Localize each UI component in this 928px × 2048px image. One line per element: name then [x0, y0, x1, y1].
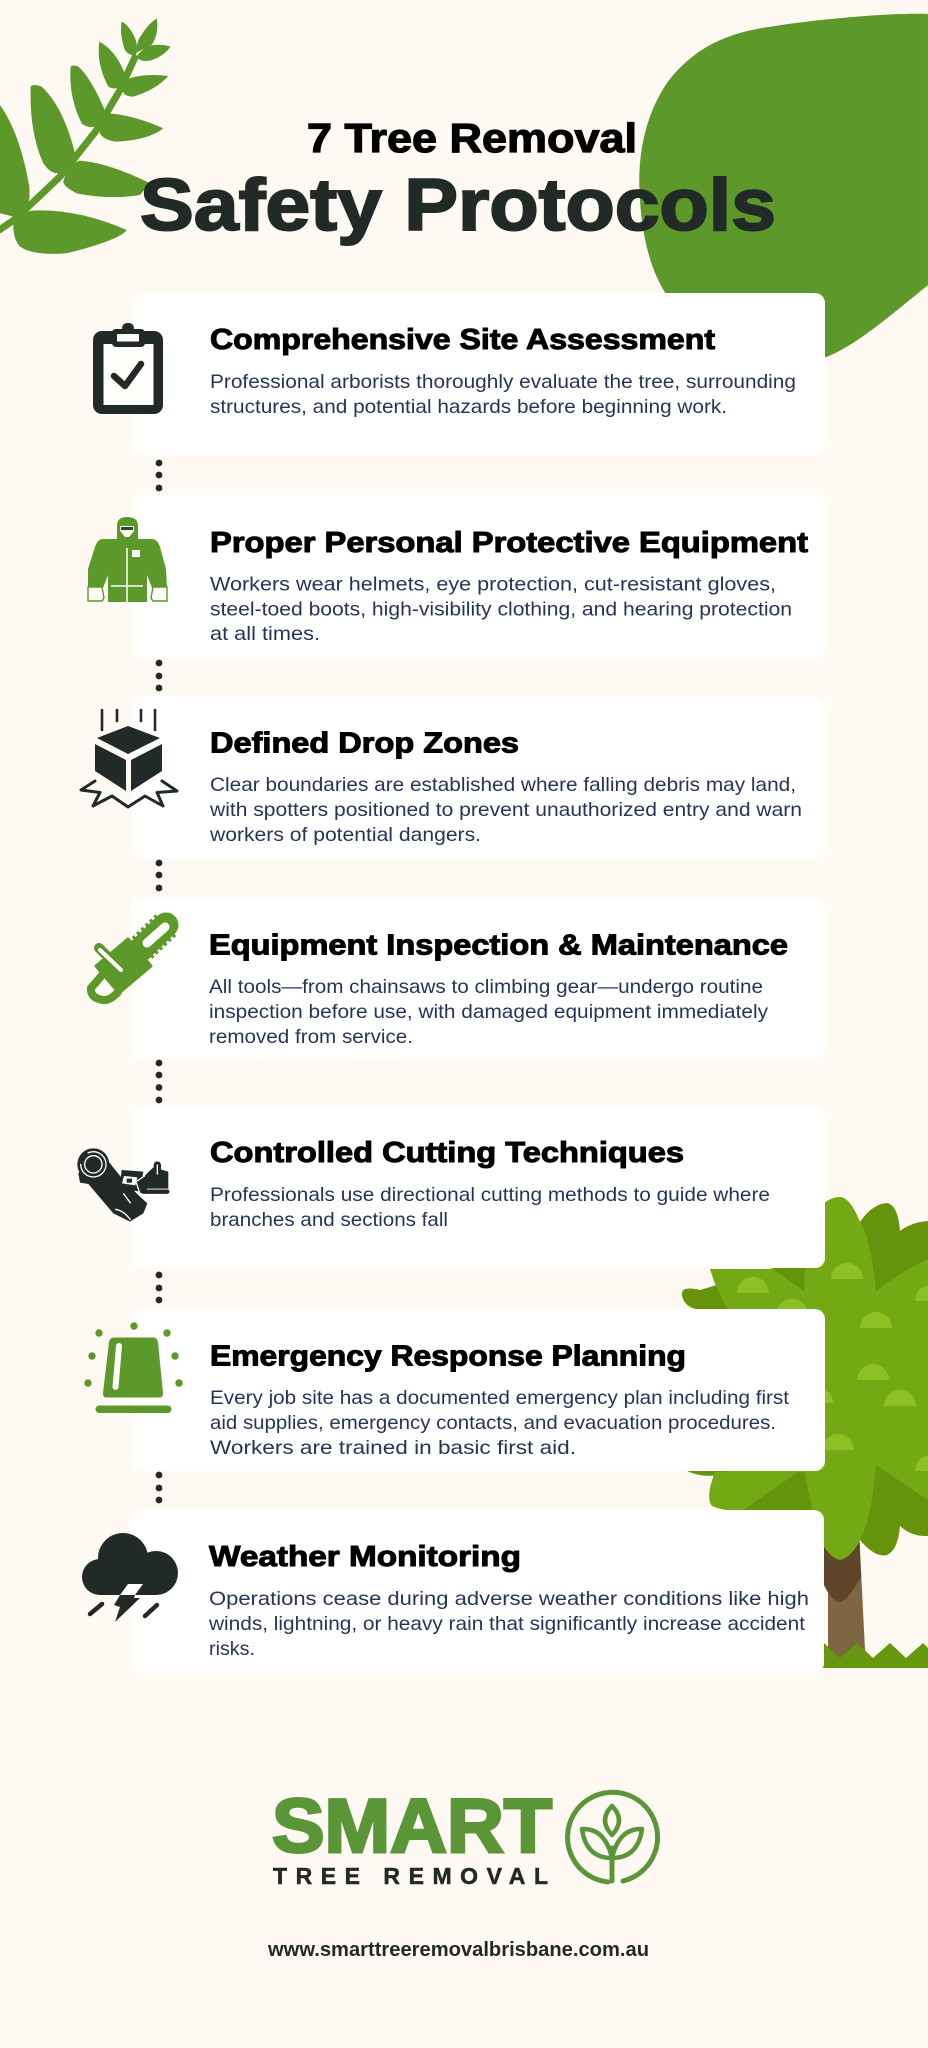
- description: structures, and potential hazards before beginning work.: [210, 396, 727, 418]
- description: [210, 1184, 770, 1231]
- description: winds, lightning, or heavy rain that significantly increase accident: [208, 1613, 806, 1635]
- description: [209, 774, 802, 846]
- description: risks.: [209, 1638, 255, 1660]
- icon: siren: [84, 1322, 183, 1413]
- heading: Weather Monitoring: [209, 1541, 521, 1573]
- icon: log and chainsaw: [77, 1148, 168, 1222]
- title: [140, 115, 776, 246]
- title line 2: Safety Protocols: [140, 165, 776, 246]
- icon: protective suit: [88, 517, 167, 602]
- panel: weather monitoring: [82, 1510, 824, 1673]
- icon: clipboard: [93, 323, 163, 414]
- connector dots 2: [156, 660, 162, 691]
- description: Workers wear helmets, eye protection, cut-resistant gloves,: [210, 574, 776, 596]
- connector dots 3: [156, 860, 162, 891]
- description: Clear boundaries are established where falling debris may land,: [210, 774, 796, 796]
- connector dots 4: [156, 1060, 162, 1103]
- panel: emergency response planning: [84, 1309, 825, 1471]
- description: at all times.: [210, 623, 320, 645]
- panel: equipment inspection and maintenance: [91, 898, 825, 1059]
- decorative green blob: [639, 14, 928, 357]
- description: [209, 976, 768, 1048]
- logo: smart tree removal: [272, 1784, 658, 1889]
- logo wordmark: SMART: [272, 1784, 552, 1869]
- connector dots 6: [156, 1472, 162, 1503]
- logo subline: TREE REMOVAL: [273, 1863, 548, 1889]
- website url: www.smarttreeremovalbrisbane.com.au: [267, 1939, 649, 1961]
- description: aid supplies, emergency contacts, and evacuation procedures.: [210, 1412, 776, 1434]
- description: [210, 574, 792, 645]
- heading: Comprehensive Site Assessment: [210, 324, 716, 356]
- description: workers of potential dangers.: [209, 824, 481, 846]
- logo emblem: [568, 1792, 658, 1882]
- panel: controlled cutting techniques: [77, 1106, 825, 1268]
- description: [210, 371, 796, 418]
- description: inspection before use, with damaged equipment immediately: [209, 1001, 768, 1023]
- icon: falling box: [81, 710, 177, 807]
- panel: defined drop zones: [81, 696, 825, 859]
- heading: Proper Personal Protective Equipment: [210, 527, 809, 559]
- description: branches and sections fall: [210, 1209, 448, 1231]
- description: steel-toed boots, high-visibility clothing, and hearing protection: [210, 598, 792, 620]
- illustration: tree: [682, 1197, 928, 1668]
- icon: chainsaw: [91, 925, 166, 1000]
- title line 1: 7 Tree Removal: [307, 115, 637, 161]
- description: All tools—from chainsaws to climbing gear—undergo routine: [209, 976, 763, 998]
- description: Professionals use directional cutting methods to guide where: [210, 1184, 770, 1206]
- icon: fern branch: [0, 18, 171, 254]
- heading: Equipment Inspection & Maintenance: [209, 930, 788, 962]
- icon: storm cloud: [82, 1533, 178, 1622]
- description: Operations cease during adverse weather conditions like high: [209, 1588, 809, 1610]
- description: Every job site has a documented emergency plan including first: [210, 1387, 790, 1409]
- heading: Controlled Cutting Techniques: [210, 1137, 684, 1169]
- connector dots 1: [156, 460, 162, 491]
- description: [210, 1387, 790, 1459]
- description: [208, 1588, 809, 1660]
- panel: proper personal protective equipment: [88, 495, 825, 658]
- description: removed from service.: [209, 1026, 413, 1048]
- description: with spotters positioned to prevent unauthorized entry and warn: [209, 799, 802, 821]
- heading: Emergency Response Planning: [210, 1340, 686, 1372]
- panel: comprehensive site assessment: [93, 293, 825, 455]
- heading: Defined Drop Zones: [210, 728, 519, 760]
- connector dots 5: [156, 1272, 162, 1303]
- description: Workers are trained in basic first aid.: [210, 1437, 576, 1459]
- description: Professional arborists thoroughly evaluate the tree, surrounding: [210, 371, 796, 393]
